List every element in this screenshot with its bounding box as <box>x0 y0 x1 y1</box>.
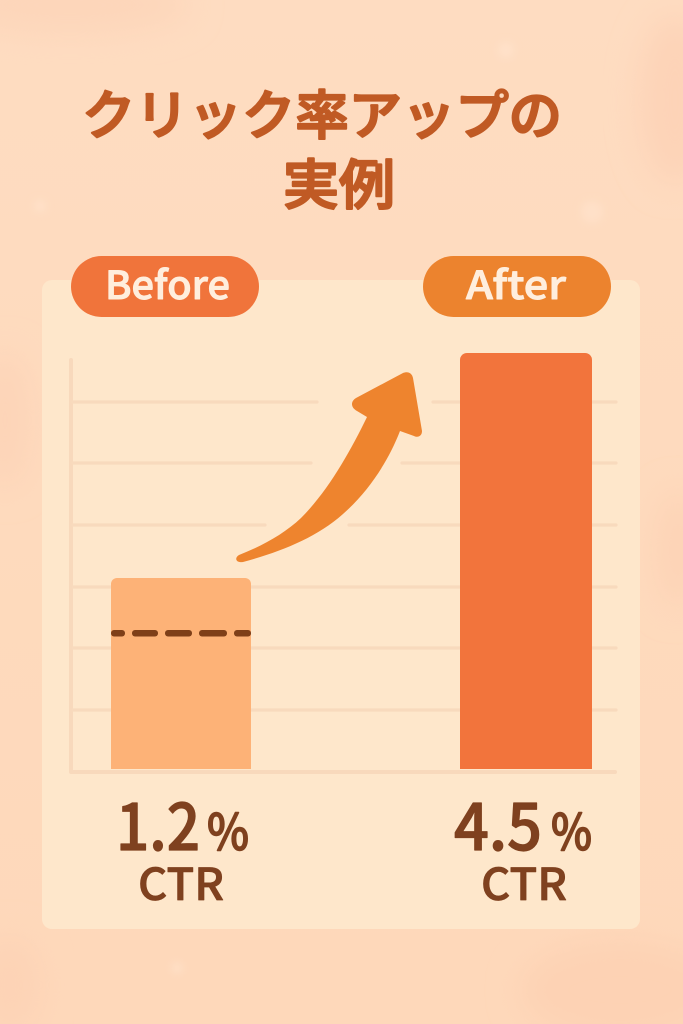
value: before: CTR <box>138 849 224 913</box>
value: after: 4.5 <box>454 777 542 869</box>
pill: before <box>71 255 259 317</box>
value: after: % <box>551 793 592 865</box>
value: before: % <box>207 793 249 865</box>
pill: after: After <box>466 255 567 311</box>
title <box>82 74 562 220</box>
bar: after <box>460 353 592 769</box>
value: before: 1.2 <box>116 777 200 869</box>
pill: after <box>423 255 611 317</box>
value: after <box>454 777 592 913</box>
pill: before: Before <box>105 255 230 311</box>
bar: before <box>111 578 251 769</box>
arrow <box>236 372 422 562</box>
panel: chart card <box>42 280 640 929</box>
value: after: CTR <box>481 849 567 913</box>
value: before <box>116 777 249 913</box>
chart grid and axes <box>69 358 617 774</box>
dashed marker line <box>111 630 251 636</box>
title: 実例 <box>283 141 395 220</box>
title: クリック率アップの <box>82 74 562 150</box>
